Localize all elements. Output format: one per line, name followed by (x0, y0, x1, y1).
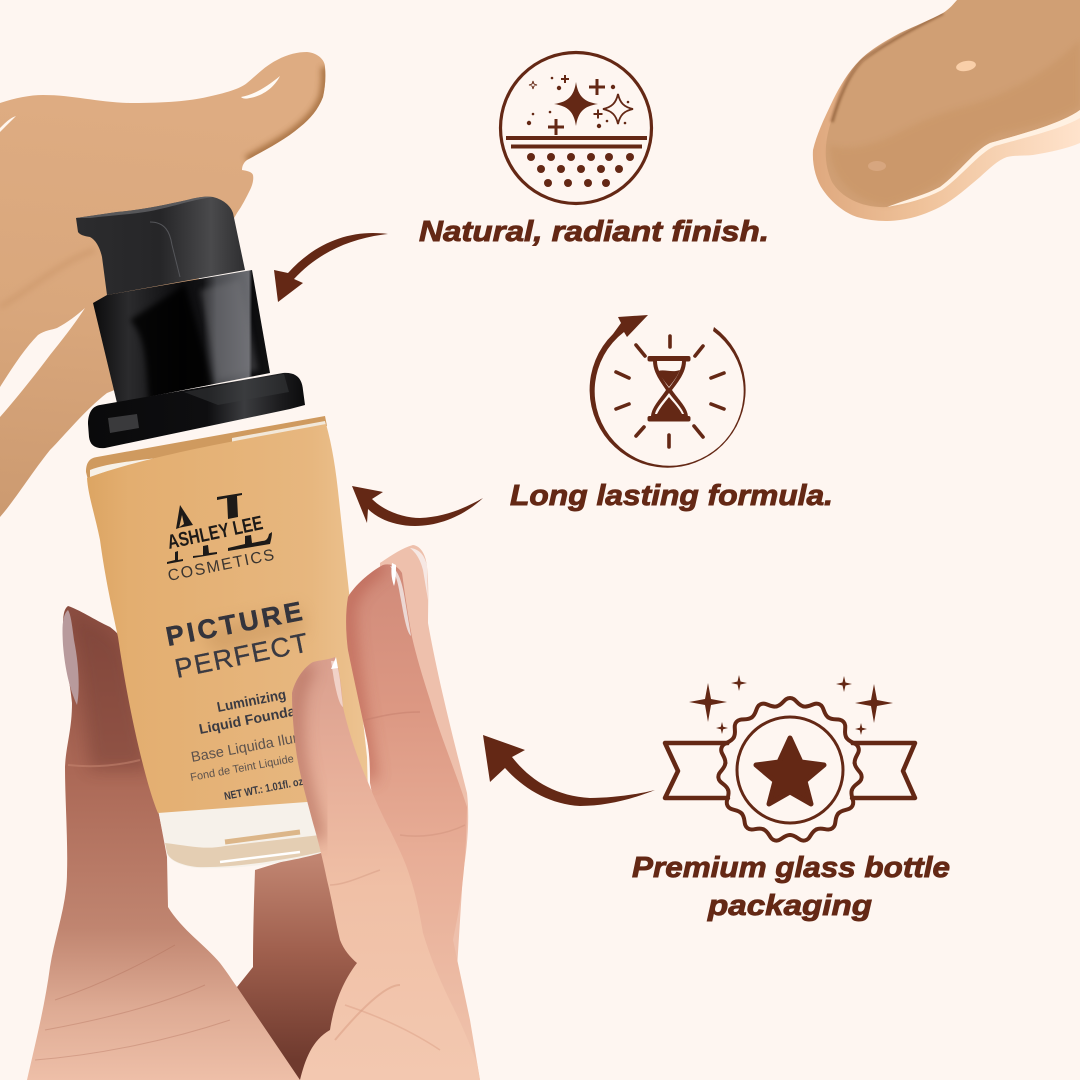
foundation smear: top right (813, 0, 1080, 221)
monogram A (176, 505, 193, 529)
arrow: to pump (274, 233, 388, 302)
icon: left fingernail (63, 610, 79, 705)
caption: natural finish: Natural, radiant finish. (419, 216, 769, 248)
product description (190, 692, 303, 800)
icon: premium badge (665, 675, 915, 843)
product name: PICTURE (163, 596, 305, 652)
bottle neck glass (86, 416, 327, 480)
product name: PERFECT (172, 628, 310, 684)
hand: middle finger (346, 563, 480, 1080)
hand: back of fingers under bottle (237, 850, 400, 1080)
icon: front fingernail (331, 661, 343, 707)
product description: Fond de Teint Liquide Illuminateur (189, 742, 354, 784)
icon: middle fingernail (390, 566, 411, 636)
product description: Base Liquida Iluminadora (190, 720, 355, 766)
hand: palm and left finger behind bottle (27, 606, 357, 1080)
hand: front finger and thumb base (292, 657, 480, 1080)
caption: premium packaging (632, 852, 950, 922)
bottle liquid (87, 424, 368, 813)
caption: premium packaging: Premium glass bottle (632, 852, 950, 884)
icon: long lasting hourglass (590, 315, 746, 468)
icon: skin finish circle (500, 52, 652, 204)
product name (163, 596, 310, 684)
product description: Luminizing (216, 686, 287, 715)
caption: premium packaging: packaging (707, 890, 872, 922)
product description: NET WT.: 1.01fl. oz (223, 776, 304, 803)
arrow: to glass (483, 735, 655, 806)
caption: long lasting: Long lasting formula. (510, 480, 833, 512)
arrow: to bottle (352, 486, 483, 526)
hand: back finger (380, 545, 468, 1000)
logo: Ashley Lee Cosmetics: ASHLEY LEE (165, 512, 265, 554)
logo: Ashley Lee Cosmetics: COSMETICS (166, 547, 276, 585)
monogram L (217, 493, 242, 519)
bottle glass base (158, 795, 321, 868)
foundation smear: top left (0, 52, 325, 517)
pump collar (93, 270, 270, 403)
pump head (76, 197, 245, 295)
logo: Ashley Lee Cosmetics (165, 493, 276, 585)
pump flange (88, 373, 305, 448)
product description: Liquid Foundation (198, 698, 322, 737)
bottle (76, 197, 368, 868)
icon: back fingernail (410, 548, 428, 600)
